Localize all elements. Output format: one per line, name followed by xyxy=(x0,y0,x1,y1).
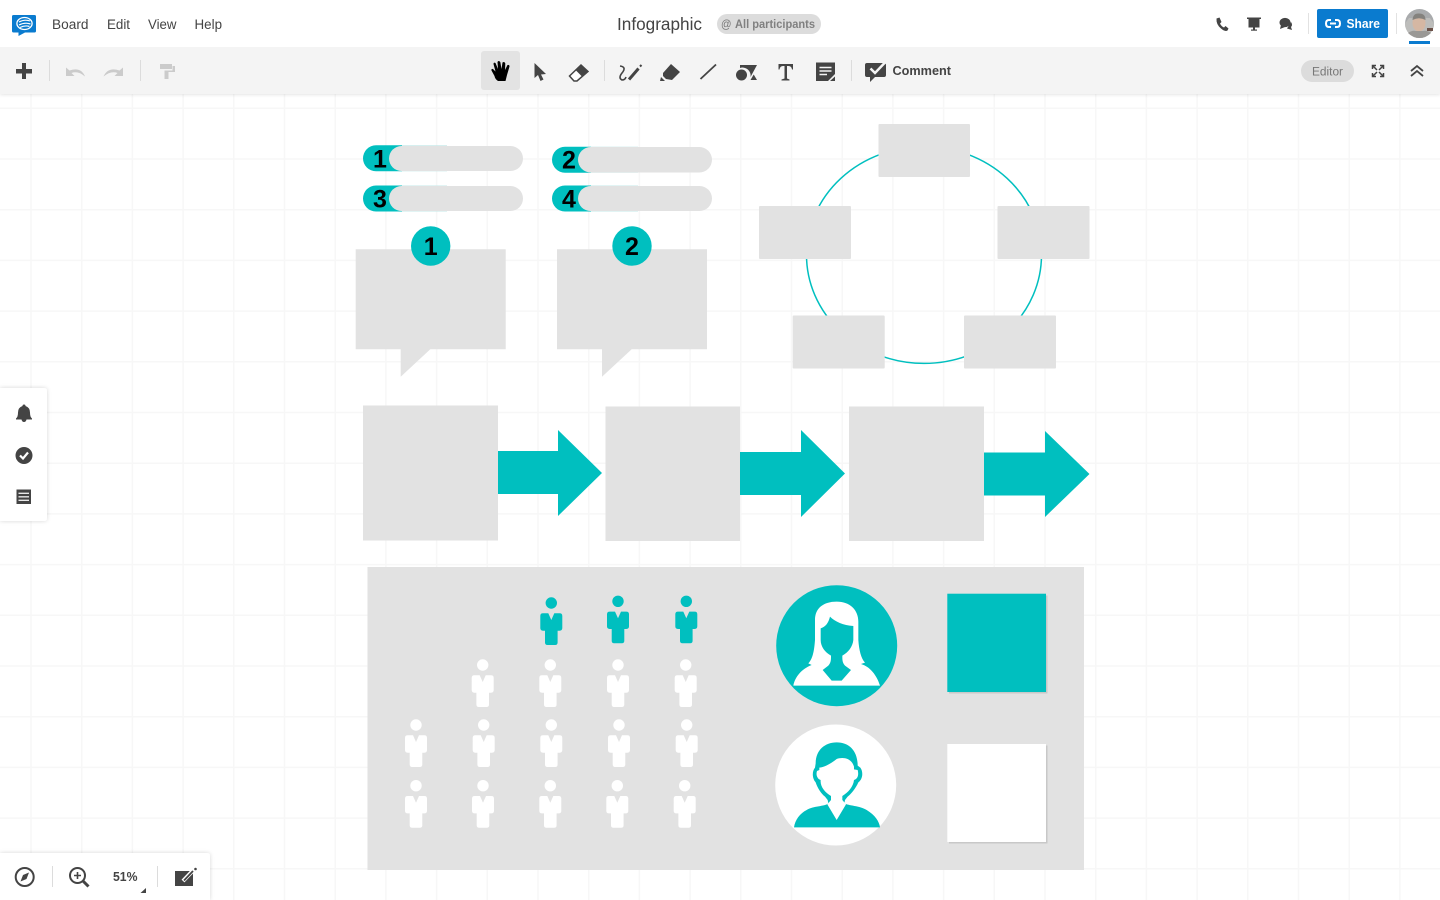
icon: chat bubbles xyxy=(1280,18,1292,30)
menu: Help: Help xyxy=(194,17,222,32)
icon: man avatar xyxy=(775,724,896,846)
icon: bell xyxy=(16,404,32,422)
arrow 1 xyxy=(498,430,602,516)
icon: hand tool, active xyxy=(481,51,520,90)
icon: format painter xyxy=(160,64,175,79)
process flow xyxy=(363,406,1090,541)
people panel xyxy=(368,567,1084,870)
icon: presentation screen xyxy=(1247,18,1261,31)
icon: list xyxy=(16,490,31,504)
cycle diagram xyxy=(759,124,1090,368)
arrow 3 xyxy=(984,431,1090,517)
user avatar xyxy=(1405,9,1434,44)
pill 3: 3 xyxy=(373,186,387,214)
speech bubble 1: 1 xyxy=(424,233,438,261)
pill 1 xyxy=(363,145,523,174)
pictogram: teal people xyxy=(540,596,697,645)
participants badge xyxy=(717,14,821,34)
left side panel xyxy=(0,388,47,521)
menu: Edit: Edit xyxy=(107,17,130,32)
menu: Board: Board xyxy=(52,17,88,32)
icon: text tool xyxy=(778,64,793,80)
icon: sticky note xyxy=(816,62,835,81)
divider xyxy=(1308,13,1396,34)
icon: check circle xyxy=(16,447,32,464)
speech bubble 2: 2 xyxy=(625,233,639,261)
toolbar xyxy=(16,51,1423,90)
icon: woman avatar xyxy=(776,585,897,706)
participants badge: All participants xyxy=(735,19,815,31)
speech bubble 1 xyxy=(356,226,506,377)
menu: View: View xyxy=(148,17,177,32)
pill bars xyxy=(363,145,712,214)
icon: undo xyxy=(66,68,85,76)
speech bubble 2 xyxy=(557,226,707,377)
icon: add xyxy=(16,63,32,79)
bottom left panel xyxy=(0,853,210,900)
pictogram: white people xyxy=(405,659,698,828)
board title: Infographic xyxy=(617,14,702,34)
arrow 2 xyxy=(740,430,845,517)
icon: select pointer xyxy=(534,63,546,81)
icon: collapse chevrons xyxy=(1411,66,1423,76)
icon: eraser xyxy=(570,65,588,81)
swatch: teal xyxy=(947,594,1048,694)
swatch: white xyxy=(947,744,1048,844)
editor badge xyxy=(1301,60,1354,82)
comment label: Comment xyxy=(892,64,952,78)
icon: zoom in xyxy=(70,868,88,886)
icon: compass xyxy=(16,868,34,886)
pill 2 xyxy=(552,146,712,174)
pill 3 xyxy=(363,186,523,214)
toolbar background xyxy=(0,47,1440,94)
pill 2: 2 xyxy=(562,146,576,174)
pill 1: 1 xyxy=(373,146,387,174)
icon: app logo xyxy=(12,15,36,36)
icon: freehand pen xyxy=(620,65,642,80)
icon: redo xyxy=(104,68,123,76)
share button: Share xyxy=(1346,17,1380,31)
icon: edit xyxy=(175,868,197,886)
editor badge: Editor xyxy=(1312,66,1343,78)
icon: shapes xyxy=(736,65,757,80)
pill 4 xyxy=(552,186,712,214)
pill 4: 4 xyxy=(562,186,576,214)
share button xyxy=(1317,9,1388,38)
icon: line xyxy=(700,64,716,79)
icon: fullscreen xyxy=(1372,66,1384,76)
top menu bar xyxy=(0,0,1440,47)
zoom level: 51% xyxy=(113,870,138,884)
icon: highlighter xyxy=(660,64,680,81)
participants badge: @ xyxy=(721,17,732,31)
icon: dropdown corner xyxy=(140,888,146,893)
icon: comment check xyxy=(865,62,886,82)
icon: phone xyxy=(1216,18,1228,31)
